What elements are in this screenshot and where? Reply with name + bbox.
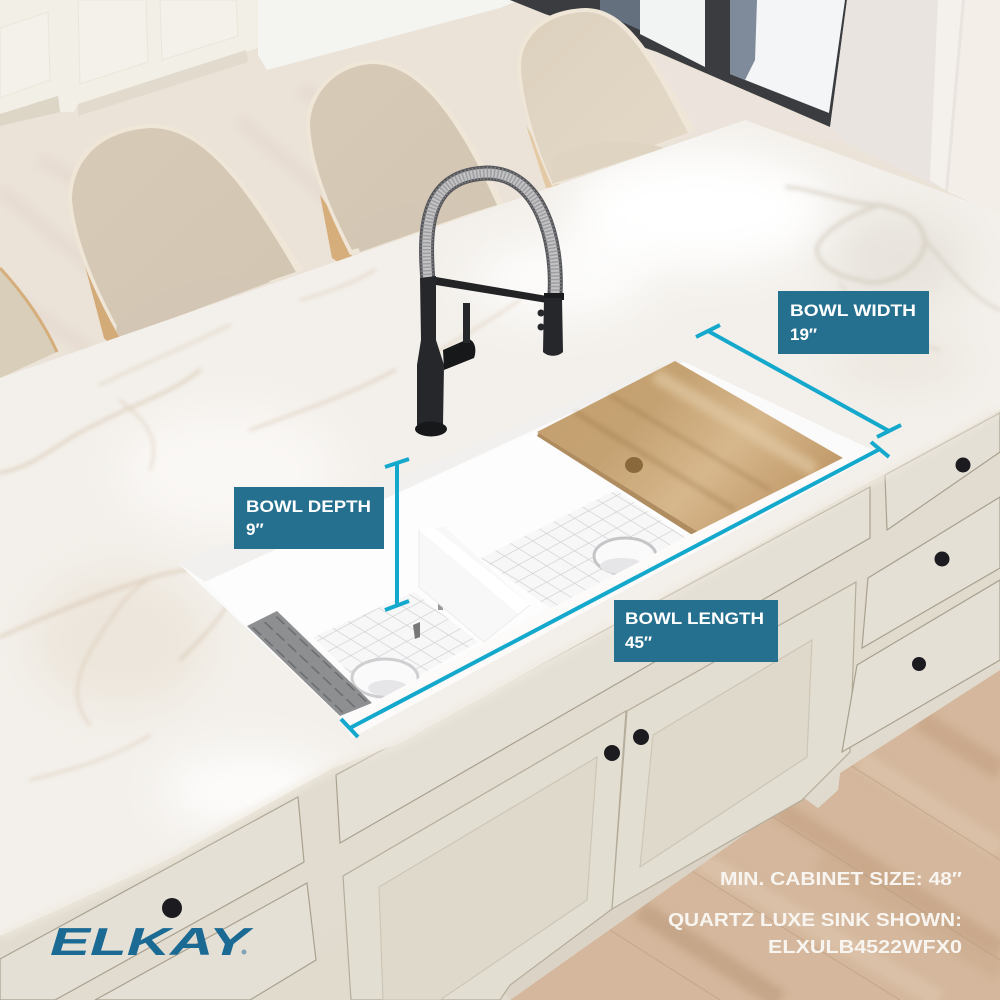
right door (612, 582, 856, 909)
front lip (340, 447, 880, 738)
callout: bowl length: BOWL LENGTH (625, 609, 764, 628)
logo: Elkay: ELKAY (50, 921, 254, 964)
divider (419, 527, 530, 642)
chair 3 (517, 8, 696, 188)
right wall (830, 0, 1000, 215)
sill (540, 18, 848, 150)
wall (258, 0, 520, 70)
callout: bowl depth: BOWL DEPTH (246, 497, 371, 516)
dimension: bowl depth line (385, 459, 409, 610)
back cabinets (0, 0, 258, 114)
spec text: MIN. CABINET SIZE: 48″ (720, 869, 962, 889)
back wall (205, 430, 690, 700)
sink (178, 358, 880, 738)
rim ledge (178, 358, 684, 582)
spec text: ELXULB4522WFX0 (768, 937, 962, 957)
callout: bowl width: BOWL WIDTH (790, 301, 916, 320)
floor: lower right (510, 670, 1000, 1000)
cutting board (537, 361, 843, 538)
left drawers (0, 797, 304, 1000)
long false drawer (336, 487, 870, 843)
knobs (162, 458, 970, 918)
callout: bowl depth: 9″ (246, 520, 264, 539)
cabinets (0, 400, 1000, 1000)
left door (343, 711, 626, 1000)
spec text: QUARTZ LUXE SINK SHOWN: (668, 910, 962, 930)
callout: bowl length: 45″ (625, 633, 652, 652)
window (510, 0, 847, 127)
dimension: bowl length line (341, 442, 889, 737)
chairs (0, 8, 696, 378)
chair 1 (68, 124, 304, 342)
faucet (415, 173, 564, 436)
callout: bowl width (778, 291, 929, 354)
chair 2 (306, 60, 505, 262)
callout: bowl length (614, 600, 778, 662)
callout: bowl depth (234, 487, 384, 549)
left bowl grid (313, 592, 478, 700)
right drawers (885, 413, 1000, 530)
logo: Elkay (50, 921, 254, 964)
spec text (668, 869, 962, 957)
chair 4 partial (0, 268, 57, 378)
toe kick (500, 795, 800, 1000)
callout: bowl width: 19″ (790, 325, 817, 344)
colander tray (247, 611, 372, 716)
right bowl grid (481, 490, 685, 610)
dimension: bowl width line (696, 325, 901, 437)
